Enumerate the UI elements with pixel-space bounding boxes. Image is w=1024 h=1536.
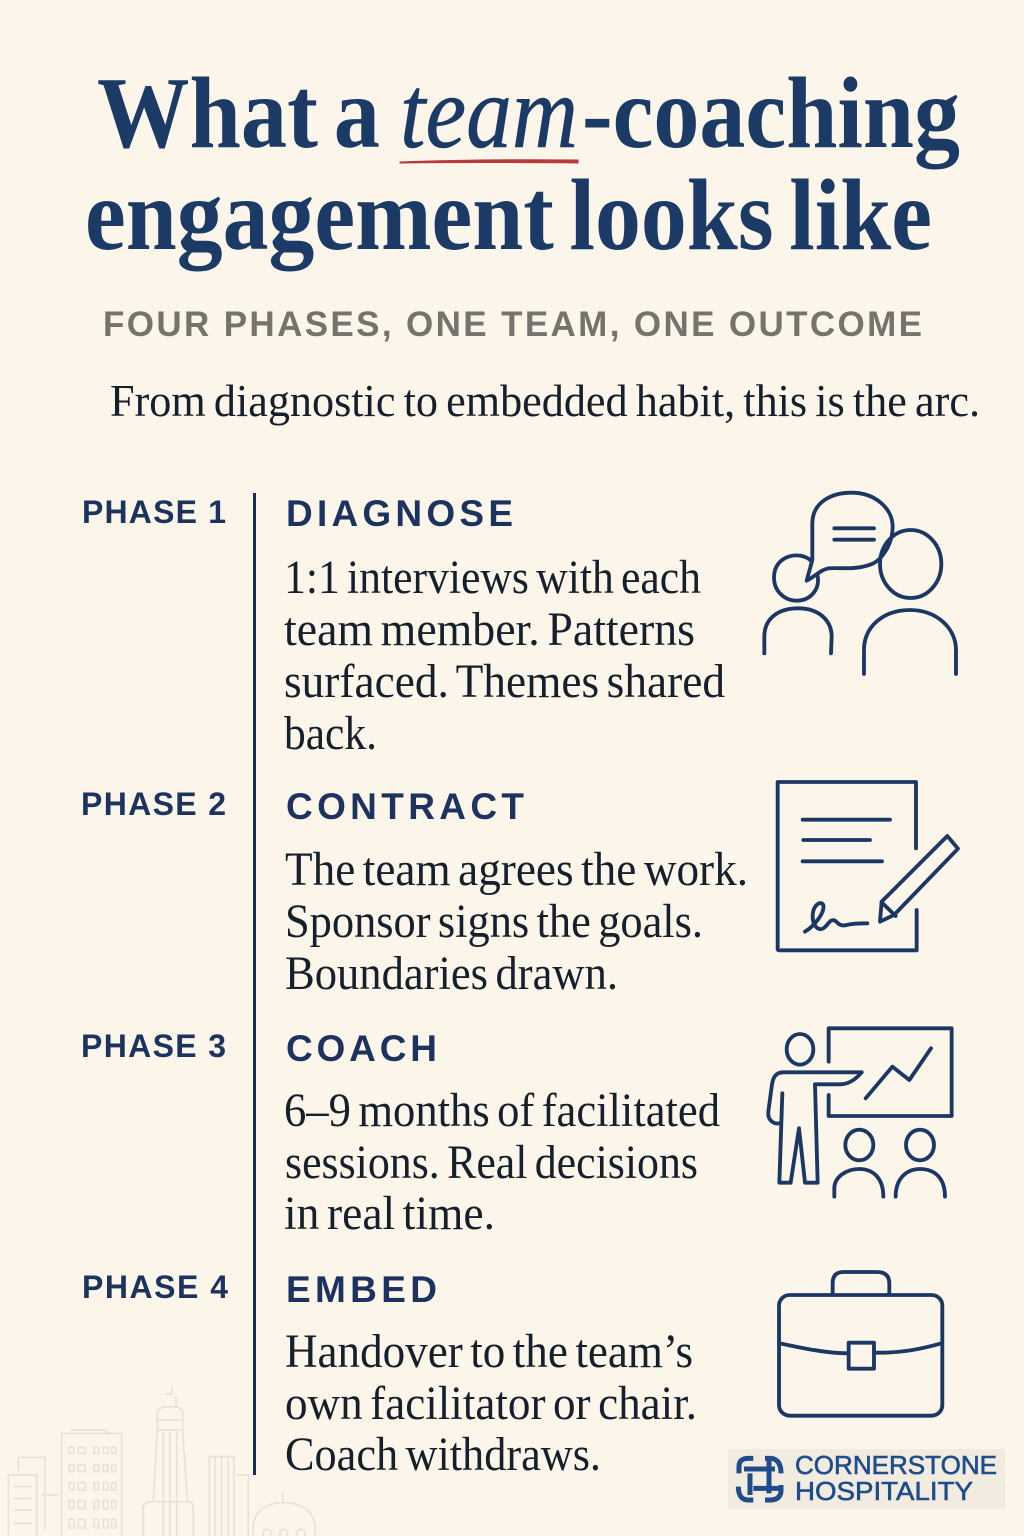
body: diagnose: team member. Patterns (284, 603, 695, 656)
body: contract: Boundaries drawn. (285, 947, 618, 1000)
body: embed: Coach withdraws. (285, 1428, 601, 1481)
title: team (400, 55, 578, 170)
icon: two people talking (764, 493, 956, 674)
phase label 4: PHASE 4 (82, 1269, 228, 1305)
phase label 1: PHASE 1 (82, 494, 226, 530)
body: coach: 6–9 months of facilitated (284, 1084, 720, 1137)
heading: embed: EMBED (286, 1269, 437, 1310)
panel: phase 2 contract (81, 782, 958, 1000)
icon: briefcase (779, 1272, 942, 1416)
panel: phase 3 coach (81, 1028, 952, 1240)
logo wordmark: CORNERSTONE (795, 1450, 997, 1480)
title: engagement looks like (85, 159, 932, 272)
body: diagnose: surfaced. Themes shared (284, 655, 725, 708)
body: contract: Sponsor signs the goals. (285, 895, 703, 948)
subtitle: FOUR PHASES, ONE TEAM, ONE OUTCOME (103, 305, 922, 344)
icon: presenter at board (768, 1028, 952, 1197)
heading: coach: COACH (286, 1028, 437, 1069)
body: contract: The team agrees the work. (285, 843, 748, 896)
red underline (400, 160, 578, 163)
body: embed: own facilitator or chair. (285, 1377, 697, 1430)
title: What a (97, 57, 380, 170)
title (85, 55, 960, 272)
body: embed: Handover to the team’s (285, 1325, 693, 1378)
body: diagnose (284, 551, 725, 760)
tagline: From diagnostic to embedded habit, this is the arc. (110, 375, 980, 426)
logo: cornerstone hospitality (728, 1449, 1005, 1509)
body: diagnose: 1:1 interviews with each (284, 551, 701, 604)
body: coach: in real time. (284, 1187, 495, 1240)
body: contract (285, 843, 748, 1000)
body: embed (285, 1325, 697, 1481)
body: coach: sessions. Real decisions (285, 1136, 698, 1189)
phase label 3: PHASE 3 (81, 1028, 226, 1064)
panel: phase 1 diagnose (82, 493, 956, 760)
body: diagnose: back. (284, 707, 377, 760)
heading: contract: CONTRACT (286, 786, 524, 827)
icon: chain-link square (738, 1458, 782, 1500)
title: -coaching (582, 57, 960, 170)
timeline rule (253, 493, 256, 1475)
icon: signed document (778, 782, 958, 950)
panel: phase 4 embed (82, 1269, 942, 1481)
logo: cornerstone hospitality: HOSPITALITY (795, 1476, 973, 1506)
phase label 2: PHASE 2 (81, 786, 226, 822)
heading: diagnose: DIAGNOSE (286, 493, 513, 534)
body: coach (284, 1084, 720, 1240)
skyline watermark (8, 1387, 315, 1536)
